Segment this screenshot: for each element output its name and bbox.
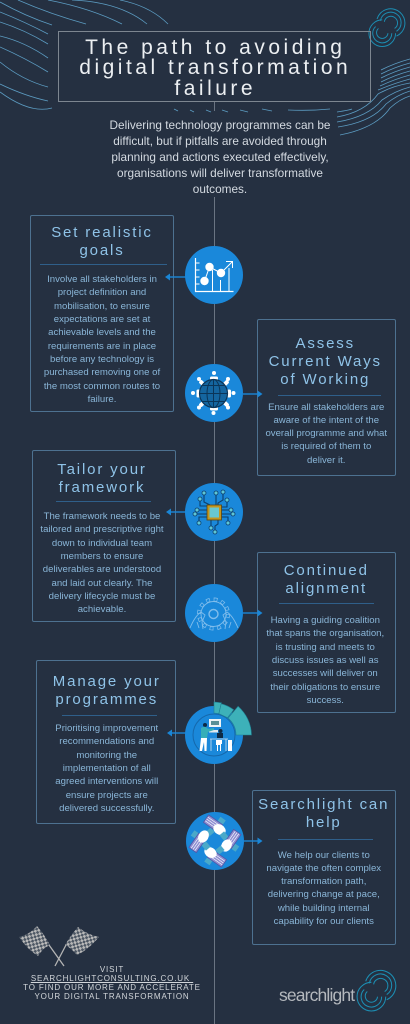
call to action: VISIT — [100, 964, 124, 974]
body text: purchased removing one of — [44, 367, 160, 378]
arrows — [160, 270, 270, 850]
body text: members to ensure — [61, 551, 143, 562]
panel: tailor your framework — [32, 450, 176, 622]
body text — [31, 510, 173, 617]
body text: Ensure all stakeholders are — [268, 402, 384, 412]
heading: framework — [59, 479, 145, 496]
body text: success. — [307, 695, 344, 706]
body text: recommendations and — [59, 736, 154, 747]
title: The path to avoiding — [85, 36, 345, 59]
intro text: organisations will deliver transformative — [117, 166, 323, 180]
intro text: outcomes. — [193, 182, 247, 196]
intro text: planning and actions executed effectively, — [111, 150, 329, 164]
heading: Set realistic — [51, 224, 153, 241]
body text: delivered successfully. — [59, 803, 154, 814]
heading: Tailor your — [57, 461, 147, 478]
heading: goals — [79, 242, 125, 259]
body text: is required of them to — [281, 441, 371, 452]
heading — [256, 335, 394, 389]
timeline connector — [214, 102, 215, 111]
intro text: difficult, but if pitfalls are avoided through — [113, 134, 327, 148]
icon: line chart — [185, 246, 243, 304]
body text: navigate the often complex — [266, 863, 381, 874]
title — [60, 38, 371, 100]
body text — [252, 848, 395, 928]
icon: top-right rings — [368, 7, 406, 48]
body text: tailored and prescriptive right — [40, 524, 164, 535]
body text: their obligations to ensure — [270, 682, 380, 693]
call to action — [10, 964, 214, 1001]
panel: continued alignment — [256, 552, 396, 713]
body text: expectations are set at — [54, 314, 150, 325]
body text: deliver it. — [307, 455, 345, 466]
heading: of Working — [280, 371, 370, 388]
body text — [31, 273, 173, 406]
title: digital transformation — [79, 56, 351, 79]
heading — [252, 796, 395, 832]
heading: help — [306, 814, 342, 831]
body text: monitoring the — [76, 750, 137, 761]
heading: Assess — [296, 335, 355, 352]
panel: searchlight can help — [252, 790, 396, 945]
decorative background lines — [0, 0, 410, 140]
title box — [58, 31, 371, 102]
heading: Continued — [284, 562, 369, 579]
heading — [31, 224, 173, 260]
body text: is trusting and meets to — [276, 642, 375, 653]
body text: requirements are in place — [48, 341, 156, 352]
title: failure — [174, 77, 256, 100]
body text: achievable. — [78, 604, 126, 615]
body text: the most common routes to — [44, 381, 160, 392]
body text: failure. — [88, 394, 116, 405]
body text: capability for our clients — [274, 916, 374, 927]
arrow: to assess current ways — [243, 390, 262, 398]
body text: successes will deliver on — [273, 668, 378, 679]
body text: down to individual team — [52, 538, 152, 549]
body text: delivering change at pace, — [268, 889, 380, 900]
arrow: to set realistic goals — [165, 274, 186, 280]
heading — [31, 461, 173, 497]
body text: while building internal — [278, 903, 370, 914]
heading — [258, 562, 395, 598]
panel: manage your programmes — [36, 660, 176, 824]
icon: circuit chip — [185, 483, 243, 541]
heading: Current Ways — [269, 353, 382, 370]
icon: checkered flags — [19, 926, 99, 966]
body text: before any technology is — [50, 354, 154, 365]
body text: implementation of all — [63, 763, 151, 774]
icon: gears and people — [185, 584, 243, 642]
body text — [258, 400, 395, 467]
arrow: to manage programmes — [167, 730, 186, 736]
body text: project definition and — [58, 287, 146, 298]
body text: aware of the intent of the — [273, 415, 379, 426]
body text: achievable levels and the — [48, 327, 156, 338]
heading: Manage your — [53, 673, 161, 690]
arrow: to tailor framework — [166, 508, 186, 516]
body text: and laid out clearly. The — [52, 578, 152, 589]
call to action: TO FIND OUR MORE AND ACCELERATE — [23, 983, 201, 992]
body text: mobilisation, to ensure — [54, 301, 150, 312]
call to action: SEARCHLIGHTCONSULTING.CO.UK — [31, 974, 190, 983]
intro text: Delivering technology programmes can be — [110, 118, 330, 132]
body text: overall programme and what — [265, 428, 387, 439]
icon: globe with people — [185, 364, 243, 422]
heading: programmes — [55, 691, 158, 708]
body text: ensure projects are — [66, 790, 148, 801]
panel: assess current ways of working — [256, 318, 396, 476]
heading: alignment — [285, 580, 367, 597]
logo wordmark: searchlight — [279, 985, 354, 1005]
central timeline — [214, 197, 215, 1024]
body text: that spans the organisation, — [266, 628, 384, 639]
arrow: to searchlight can help — [244, 838, 262, 844]
body text: We help our clients to — [278, 850, 370, 860]
arrow: to continued alignment — [243, 610, 262, 616]
body text: Prioritising improvement — [55, 723, 158, 734]
body text: deliverables are understood — [43, 564, 161, 575]
intro text — [100, 117, 340, 197]
body text: The framework needs to be — [44, 511, 160, 522]
icon: team at desk with chart wedges — [185, 702, 252, 764]
logo rings — [356, 969, 397, 1012]
heading: Searchlight can — [258, 796, 389, 813]
body text: transformation path, — [281, 876, 366, 887]
body text: Having a guiding coalition — [271, 615, 380, 626]
body text: delivery lifecycle must be — [49, 591, 155, 602]
icon: joined hands — [186, 812, 244, 870]
body text: discuss issues as well as — [272, 655, 379, 666]
heading — [38, 673, 176, 709]
call to action: YOUR DIGITAL TRANSFORMATION — [34, 992, 190, 1001]
panel: set realistic goals — [30, 215, 174, 412]
logo: searchlight — [278, 968, 398, 1013]
body text — [38, 722, 176, 815]
body text: Involve all stakeholders in — [47, 274, 157, 285]
body text: agreed interventions will — [55, 776, 158, 787]
body text — [256, 614, 394, 707]
